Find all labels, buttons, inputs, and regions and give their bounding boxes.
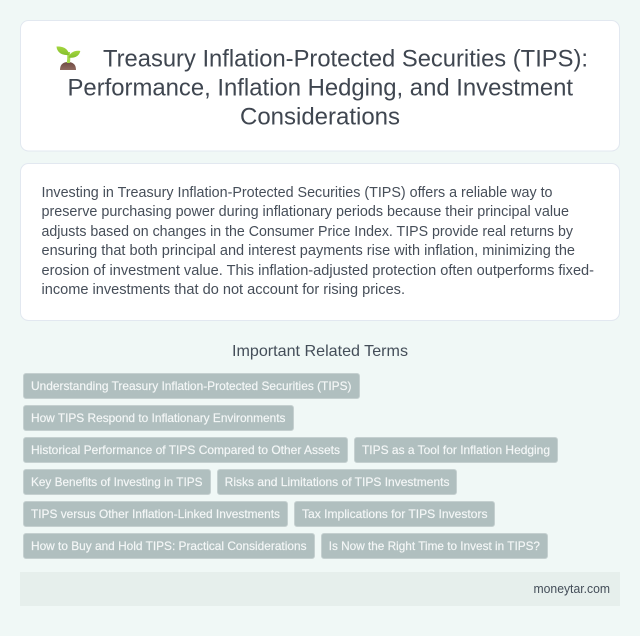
chip: Understanding TIPS: [24, 374, 360, 398]
heading: title: Considerations: [240, 104, 400, 130]
text block: description: Investing in Treasury Inflation-Protected Securities (TIPS) offers a reliable way to: [42, 185, 552, 201]
footer: [20, 572, 620, 606]
chip: TIPS versus Other: TIPS versus Other Inflation-Linked Investments: [31, 507, 280, 521]
chip: Tax Implications: Tax Implications for TIPS Investors: [302, 507, 488, 521]
text block: description: [42, 185, 594, 298]
chip: TIPS versus Other: [24, 502, 288, 526]
chip: Is Now the Right Time: [322, 534, 548, 558]
heading: title: Treasury Inflation-Protected Securities (TIPS):: [103, 46, 588, 72]
chip: Key Benefits: [24, 470, 210, 494]
chip: Historical Performance: [24, 438, 348, 462]
chip: Is Now the Right Time: Is Now the Right Time to Invest in TIPS?: [329, 539, 540, 553]
chip: Understanding TIPS: Understanding Treasury Inflation-Protected Securities (TIPS): [31, 379, 352, 393]
chip: Tax Implications: [294, 502, 494, 526]
chip: Risks and Limitations: [218, 470, 456, 494]
text block: description: income investments that do not account for rising prices.: [42, 282, 405, 298]
chip: How to Buy and Hold: How to Buy and Hold TIPS: Practical Considerations: [31, 539, 306, 553]
chip: Historical Performance: Historical Performance of TIPS Compared to Other Assets: [31, 443, 340, 457]
footer text: moneytar.com: moneytar.com: [534, 581, 610, 596]
chip: How to Buy and Hold: [24, 534, 314, 558]
chip: How TIPS Respond: [24, 406, 294, 430]
heading: title: Performance, Inflation Hedging, and Investment: [68, 74, 573, 102]
chip: Key Benefits: Key Benefits of Investing in TIPS: [31, 475, 202, 489]
text block: description: erosion of investment value. This inflation-adjusted protection often outperforms fixed-: [42, 263, 594, 279]
heading: Important Related Terms: Important Related Terms: [232, 343, 408, 360]
heading: title: [68, 46, 588, 130]
chip: TIPS as a Tool: [354, 438, 558, 462]
panel: title card: [20, 20, 620, 151]
chip: How TIPS Respond: How TIPS Respond to Inflationary Environments: [31, 411, 286, 425]
text block: description: adjusts based on changes in the Consumer Price Index. TIPS provide real returns by: [42, 224, 574, 240]
panel: related term chips: [24, 374, 558, 558]
chip: TIPS as a Tool: TIPS as a Tool for Inflation Hedging: [362, 443, 550, 457]
text block: description: ensuring that both principal and interest payments rise with inflation, minimizing the: [42, 243, 575, 259]
panel: description: [20, 164, 620, 320]
text block: description: preserve purchasing power during inflationary periods because their principal value: [42, 204, 569, 220]
icon: seedling: [56, 46, 80, 70]
chip: Risks and Limitations: Risks and Limitations of TIPS Investments: [225, 475, 450, 489]
